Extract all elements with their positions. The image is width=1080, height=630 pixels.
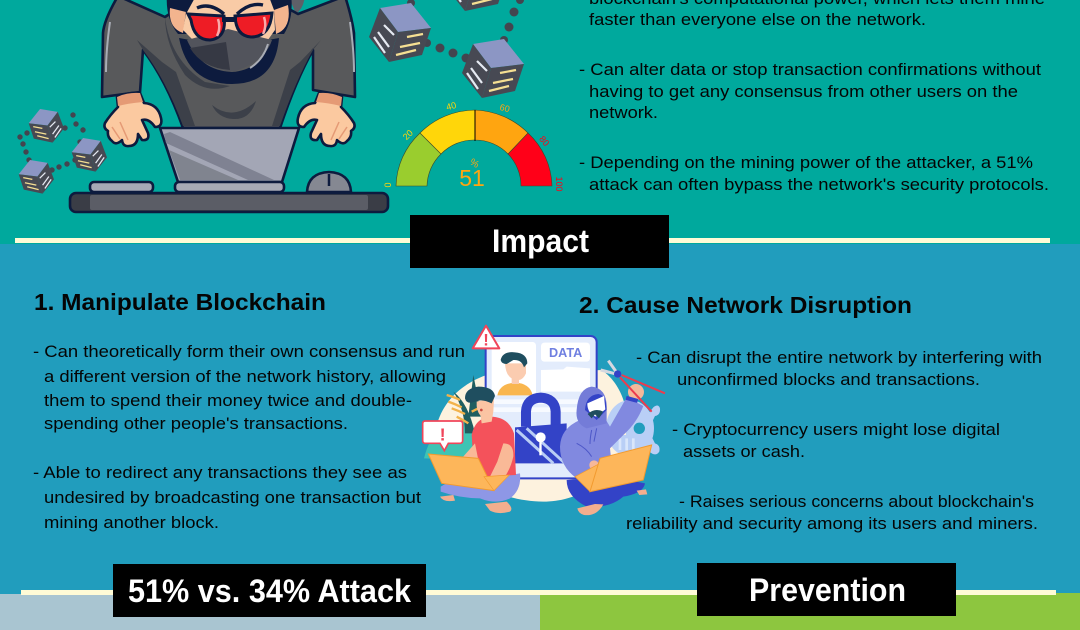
- hood opening: [585, 394, 607, 420]
- panel: green section background: [540, 593, 1080, 630]
- teal leaf: [424, 420, 477, 460]
- shackle: [526, 398, 556, 427]
- label text: 51% vs. 34% Attack: [128, 573, 411, 609]
- cream backdrop: [438, 370, 627, 502]
- padlock: [515, 398, 567, 463]
- text block: network disruption: - Raises serious concerns about blockchain's: [679, 492, 1034, 511]
- data tag: [541, 343, 590, 362]
- heading label: Prevention: [697, 563, 956, 616]
- text block: attack description: network.: [589, 103, 658, 122]
- text block: attack description: - Depending on the mining power of the attacker, a 51%: [579, 153, 1033, 172]
- arm: [490, 443, 513, 483]
- folder: [541, 367, 590, 392]
- lock body: [515, 423, 567, 463]
- divider line: bottom: [21, 590, 1056, 595]
- desk: [70, 193, 388, 212]
- laptop: [575, 463, 600, 492]
- skull eye: [634, 423, 645, 434]
- right hand: [298, 93, 355, 146]
- text block: manipulate blockchain: - Able to redirect any transactions they see as: [33, 463, 407, 482]
- right foot: [637, 489, 647, 495]
- lock stripes: [517, 428, 565, 463]
- eyebrows: [197, 4, 263, 14]
- heading label: Impact: [410, 215, 669, 268]
- left forearm: [462, 443, 478, 460]
- laptop lid: [160, 128, 299, 182]
- orange leaf sprigs: [447, 395, 478, 423]
- skull nose gap: [620, 427, 626, 435]
- laptop: [428, 454, 494, 491]
- hand on keyboard: [589, 460, 599, 470]
- gauge tick labels: [383, 100, 564, 192]
- illustration: hacker at laptop: [70, 0, 388, 212]
- text block: manipulate blockchain: - Can theoretically form their own consensus and run: [33, 342, 465, 361]
- moustache: [588, 410, 603, 418]
- blockchain chain: large cubes: [369, 0, 524, 98]
- skull cranium: [606, 400, 654, 457]
- text block: network disruption: unconfirmed blocks and transactions.: [677, 370, 980, 389]
- text block: attack description: attack can often bypass the network's security protocols.: [589, 175, 1049, 194]
- left foot: [440, 495, 455, 501]
- text block: manipulate blockchain: a different version of the network history, allowing: [44, 367, 446, 386]
- cube: [462, 39, 524, 98]
- text block: network disruption: assets or cash.: [683, 442, 805, 461]
- skull teeth: [620, 438, 633, 450]
- gauge tick labels: 0: [383, 182, 393, 188]
- hacker head: [167, 0, 292, 84]
- gauge segment orange: [475, 110, 528, 154]
- gauge tick labels: 40: [445, 100, 457, 112]
- gray hair peak: [288, 0, 305, 14]
- text block: network disruption: reliability and security among its users and miners.: [626, 514, 1038, 533]
- blockchain chain: small cubes: [17, 109, 107, 194]
- label box: [113, 564, 426, 617]
- gauge chart: 51 percent: [383, 100, 564, 192]
- speech bubble: [423, 421, 463, 451]
- keyhole: [536, 432, 546, 442]
- connecting dots: [17, 112, 86, 173]
- gauge tick labels: 60: [499, 102, 511, 114]
- heading label: 51% vs. 34% Attack: [113, 564, 426, 617]
- triangle: [473, 326, 499, 348]
- label text: Prevention: [749, 572, 906, 608]
- cube: [369, 3, 431, 62]
- cutter handles: [620, 375, 665, 412]
- desk top: [90, 195, 368, 210]
- hooded hacker: [560, 384, 652, 515]
- profile shoulders: [497, 383, 533, 395]
- profile hair: [501, 352, 527, 367]
- cuff: [626, 396, 638, 403]
- text block: attack description: faster than everyone else on the network.: [589, 10, 926, 29]
- mask highlight: [250, 44, 268, 68]
- card frame: [486, 336, 597, 478]
- exclamation: !: [440, 424, 446, 444]
- data card: [486, 336, 597, 478]
- mouse: [307, 172, 351, 192]
- cutter blades: [601, 361, 617, 374]
- gauge tick labels: 80: [537, 134, 551, 148]
- wire cutters: [601, 361, 665, 412]
- ears: [170, 5, 289, 34]
- hacker sweater: [102, 0, 355, 128]
- text block: attack description: having to get any consensus from other users on the: [589, 82, 1018, 101]
- text block: network disruption: - Cryptocurrency users might lose digital: [672, 420, 1000, 439]
- connecting dots: [407, 0, 524, 62]
- gauge segment yellow: [420, 110, 475, 154]
- label text: Impact: [492, 223, 589, 259]
- gauge tick labels: 20: [401, 128, 415, 142]
- torso: [472, 417, 516, 477]
- heading: Cause Network Disruption: 2. Cause Network Disruption: [579, 292, 912, 318]
- laptop base: [175, 182, 284, 192]
- text block: manipulate blockchain: [33, 342, 465, 532]
- text block: manipulate blockchain: undesired by broadcasting one transaction but: [44, 488, 421, 507]
- warning triangle: [473, 326, 499, 349]
- cube: [29, 109, 64, 143]
- hair: [465, 387, 495, 403]
- text block: manipulate blockchain: them to spend their money twice and double-: [44, 391, 412, 410]
- panel: blue impact background: [0, 244, 1080, 594]
- dark leaf: [453, 375, 482, 433]
- gauge segment red: [508, 133, 552, 186]
- left foot: [577, 504, 603, 515]
- glasses: [188, 13, 272, 40]
- text block: attack description: - Can alter data or stop transaction confirmations without: [579, 60, 1041, 79]
- skull cross bones: [640, 406, 660, 454]
- text block: network disruption: [626, 348, 1042, 533]
- percent sign: %: [468, 157, 481, 171]
- label box: [410, 215, 669, 268]
- text block: network disruption: - Can disrupt the entire network by interfering with: [636, 348, 1042, 367]
- laptop stripes: [164, 132, 274, 180]
- profile neck and face: [505, 363, 526, 384]
- heading: Manipulate Blockchain: 1. Manipulate Blockchain: [34, 289, 326, 315]
- sleeve highlights: [106, 22, 354, 72]
- laptop screen: [160, 128, 299, 182]
- divider line: impact: [15, 238, 1050, 243]
- hoodie strings: [577, 428, 597, 457]
- sweater shading: [137, 40, 321, 126]
- cutter pivot: [614, 370, 621, 378]
- mask: [187, 29, 272, 72]
- needle: [474, 110, 476, 141]
- hood: [576, 387, 607, 428]
- profile panel: [492, 342, 536, 395]
- gauge value: 51: [459, 165, 485, 191]
- legs: [567, 477, 645, 507]
- legs: [441, 473, 520, 502]
- text block: manipulate blockchain: mining another block.: [44, 513, 219, 532]
- bubble: [423, 421, 463, 451]
- mouse wheel: [328, 174, 330, 186]
- skull: [606, 400, 660, 457]
- card rows: [492, 399, 590, 412]
- gauge segment green: [396, 133, 441, 186]
- exclamation: !: [483, 330, 489, 349]
- neck shadow: [165, 17, 230, 89]
- panel: teal background: [0, 0, 1080, 244]
- glasses bridge: [222, 17, 237, 22]
- lens glints: [217, 17, 265, 36]
- label box: [697, 563, 956, 616]
- neck and face: [477, 398, 494, 423]
- mask: [587, 396, 605, 417]
- text block: manipulate blockchain: spending other people's transactions.: [44, 414, 348, 433]
- panel: grey section background: [0, 594, 540, 630]
- text block: attack description: [579, 0, 1049, 194]
- keyhole slot: [539, 437, 542, 455]
- cube top: [445, 0, 507, 11]
- person with laptop: [428, 387, 520, 513]
- illustration: data breach scene: [423, 326, 665, 515]
- fist: [628, 384, 644, 400]
- navy hair: [167, 0, 292, 34]
- mask fold: [190, 42, 230, 70]
- left hand: [104, 93, 161, 146]
- mouth: [480, 409, 483, 411]
- cube: [19, 160, 54, 194]
- laptop lid: [590, 445, 652, 492]
- hoodie body: [560, 397, 643, 478]
- cube: [72, 138, 107, 172]
- face: [183, 0, 275, 44]
- data tag text: DATA: [549, 346, 582, 360]
- keyboard: [90, 182, 153, 192]
- gauge tick labels: 100: [554, 176, 564, 192]
- navy mask shadow: [179, 38, 279, 84]
- right foot: [485, 502, 511, 513]
- laptop base: [484, 475, 509, 491]
